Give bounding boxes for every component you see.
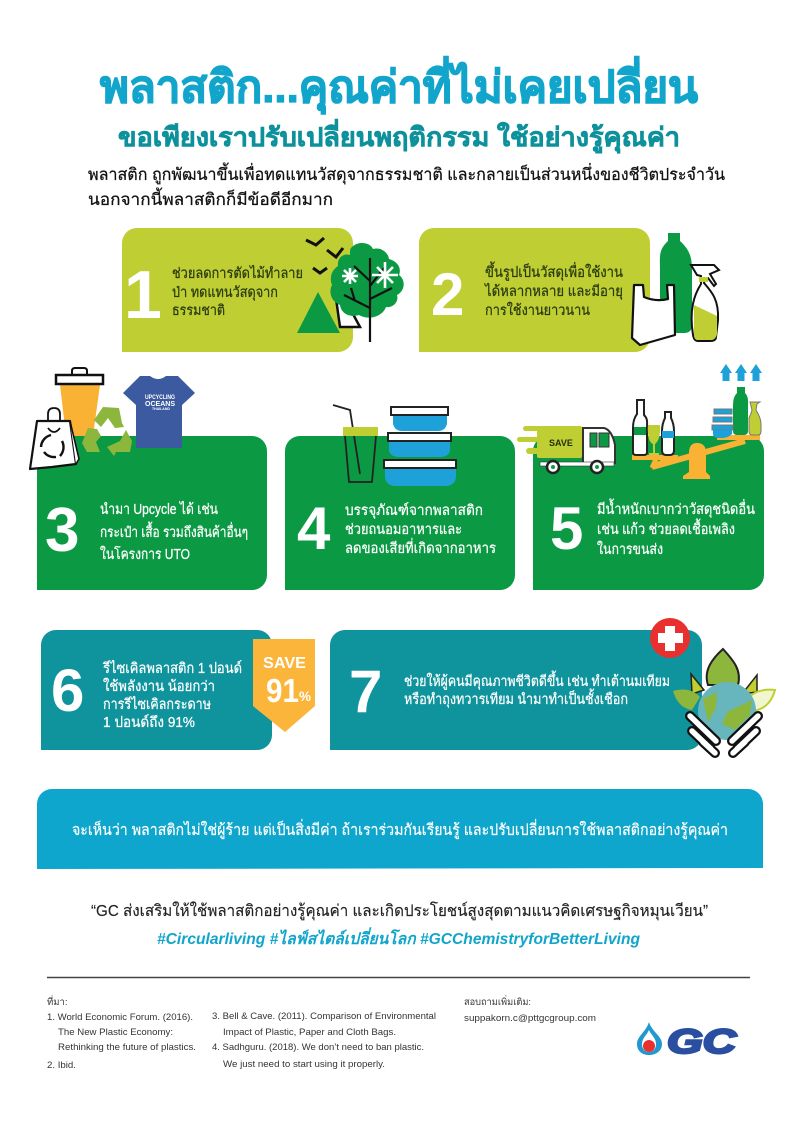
panel 1 text: ช่วยลดการตัดไม้ทำลาย <box>172 264 303 282</box>
badge: save 91%: SAVE <box>263 655 306 672</box>
panel 6 text: ใช้พลังงาน น้อยกว่า <box>103 677 215 695</box>
badge: save 91% <box>253 639 315 732</box>
panel 5 text: เช่น แก้ว ช่วยลดเชื้อเพลิง <box>597 518 735 538</box>
badge: save 91%: % <box>299 688 312 704</box>
panel 2 text <box>484 261 623 319</box>
panel 5: lightweight <box>517 364 764 590</box>
panel 7: medical uses <box>330 618 775 753</box>
references: Rethinking the future of plastics. <box>58 1042 196 1053</box>
panel 7 text: หรือทำถุงทวารเทียม นำมาทำเป็นชั้งเชือก <box>404 688 628 708</box>
panel 1 text: ป่า ทดแทนวัสดุจาก <box>172 285 278 301</box>
references: The New Plastic Economy: <box>58 1027 173 1038</box>
icon: delivery truck: SAVE <box>549 438 573 448</box>
subtitle: ขอเพียงเราปรับเปลี่ยนพฤติกรรม ใช้อย่างรู้คุณค่า <box>118 118 680 154</box>
panel 5 text: มีน้ำหนักเบากว่าวัสดุชนิดอื่น <box>597 498 755 518</box>
number 6: 6 <box>51 657 84 724</box>
panel 2 text: การใช้งานยาวนาน <box>485 301 590 319</box>
panel 1 text: ธรรมชาติ <box>172 303 225 319</box>
references <box>47 995 436 1071</box>
panel 4: food packaging <box>285 405 515 590</box>
panel 4 text: ช่วยถนอมอาหารและ <box>345 522 462 538</box>
callout banner <box>37 789 763 869</box>
panel 1 text <box>172 264 303 319</box>
badge: save 91%: 91 <box>266 672 299 709</box>
contact <box>464 995 596 1024</box>
contact: สอบถามเพิ่มเติม: <box>464 995 531 1008</box>
panel 4 text <box>345 502 496 557</box>
references: We just need to start using it properly. <box>223 1059 385 1070</box>
panel 3 text: กระเป๋า เสื้อ รวมถึงสินค้าอื่นๆ <box>100 521 248 541</box>
panel 6 text: การรีไซเคิลกระดาษ <box>103 695 211 713</box>
intro text: นอกจากนี้พลาสติกก็มีข้อดีอีกมาก <box>88 187 333 209</box>
references: Impact of Plastic, Paper and Cloth Bags. <box>223 1027 396 1038</box>
title: พลาสติก...คุณค่าที่ไม่เคยเปลี่ยน <box>100 56 698 115</box>
logo: GC <box>637 1022 737 1061</box>
icon: bin, bag, recycling arrows and shirt: UPCYCLING <box>145 395 175 401</box>
icon: bin, bag, recycling arrows and shirt: THAILAND <box>152 407 170 411</box>
icon: medical cross <box>650 618 690 658</box>
panel 2: versatile materials <box>419 228 719 352</box>
panel 3 text: นำมา Upcycle ได้ เช่น <box>100 500 218 518</box>
panel 5 text: ในการขนส่ง <box>597 540 663 558</box>
number 3: 3 <box>45 496 79 565</box>
panel 4 text: บรรจุภัณฑ์จากพลาสติก <box>345 502 483 519</box>
hashtags: #Circularliving #ไลฟ์สไตล์เปลี่ยนโลก #GCChemistryforBetterLiving <box>157 927 640 948</box>
icon: delivery truck <box>517 426 615 473</box>
icon: seesaw comparing materials <box>632 387 761 479</box>
panel 7 text: ช่วยให้ผู้คนมีคุณภาพชีวิตดีขึ้น เช่น ทำเต้านมเทียม <box>404 670 670 690</box>
panel 6 text: 1 ปอนด์ถึง 91% <box>103 714 195 731</box>
icon: bin, bag, recycling arrows and shirt <box>30 368 195 469</box>
icon: cup and stacked containers <box>333 405 456 486</box>
contact: suppakorn.c@pttgcgroup.com <box>464 1013 596 1024</box>
panel 1: reduce logging <box>122 228 404 352</box>
panel 2 text: ได้หลากหลาย และมีอายุ <box>484 282 623 300</box>
icon: earth in hands with leaves <box>673 649 775 753</box>
references: 4. Sadhguru. (2018). We don’t need to ban plastic. <box>212 1042 424 1053</box>
icon: bottle, bag and spray <box>632 233 719 345</box>
panel 4 text: ลดของเสียที่เกิดจากอาหาร <box>345 538 496 557</box>
number 7: 7 <box>349 658 382 725</box>
number 2: 2 <box>431 261 464 328</box>
panel 6 text: รีไซเคิลพลาสติก 1 ปอนด์ <box>103 659 242 677</box>
icon: up arrows <box>720 364 762 381</box>
icon: bin, bag, recycling arrows and shirt: OCEANS <box>145 401 175 408</box>
panel 3: upcycle <box>30 368 267 590</box>
panel 6 text <box>103 659 242 731</box>
icon: tree, mountain and birds <box>297 238 404 342</box>
panel 6: recycling energy <box>41 630 315 750</box>
panel 7 text <box>404 670 670 708</box>
intro text <box>88 162 725 209</box>
number 1: 1 <box>124 257 162 333</box>
intro text: พลาสติก ถูกพัฒนาขึ้นเพื่อทดแทนวัสดุจากธรรมชาติ และกลายเป็นส่วนหนึ่งของชีวิตประจำวัน <box>88 162 725 185</box>
panel 2 text: ขึ้นรูปเป็นวัสดุเพื่อใช้งาน <box>485 261 623 281</box>
quote: “GC ส่งเสริมให้ใช้พลาสติกอย่างรู้คุณค่า และเกิดประโยชน์สูงสุดตามแนวคิดเศรษฐกิจหมุนเวียน” <box>91 901 708 921</box>
number 5: 5 <box>550 495 583 562</box>
callout banner: จะเห็นว่า พลาสติกไม่ใช่ผู้ร้าย แต่เป็นสิ่งมีค่า ถ้าเราร่วมกันเรียนรู้ และปรับเปลี่ยนการใช้พลาสติกอย่างรู้คุณค่า <box>72 819 728 840</box>
panel 3 text: ในโครงการ UTO <box>100 545 190 563</box>
panel 3 text <box>100 500 248 563</box>
references: ที่มา: <box>47 995 68 1008</box>
number 4: 4 <box>297 495 331 562</box>
references: 1. World Economic Forum. (2016). <box>47 1012 193 1023</box>
references: 3. Bell & Cave. (2011). Comparison of Environmental <box>212 1011 436 1022</box>
references: 2. Ibid. <box>47 1060 76 1071</box>
panel 5 text <box>597 498 755 558</box>
logo: GC: GC <box>667 1023 737 1061</box>
